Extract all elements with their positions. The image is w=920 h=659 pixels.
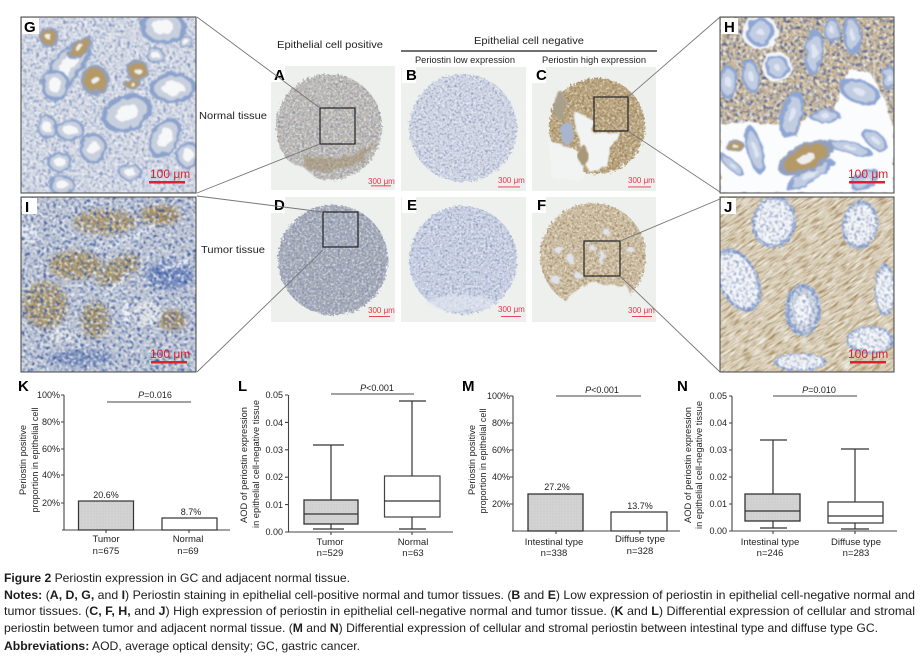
caption: tumor tissues. ( C, F, H, and J) High expression of periostin in epithelial cell-negative normal and tumor tissue. ( K and L) Differential expression of cellular and stromal [4,604,915,618]
chart L: AOD box plot, tumor vs normal: L [238,378,247,395]
panel B: tissue core, normal, low expression [401,67,526,191]
panel C: tissue core, normal, high expression: C [536,67,547,84]
chart M: periostin positive proportion, intestinal vs diffuse: 27.2% [544,482,570,492]
panel J: tumor tissue epithelial negative magnified: 100 μm [848,347,888,361]
chart N: AOD box plot, intestinal vs diffuse: 0.03 [709,445,727,455]
chart M: periostin positive proportion, intestinal vs diffuse: 20% [492,499,510,509]
chart K: periostin positive proportion, tumor vs normal: 80% [42,417,60,427]
panel E: tissue core, tumor, low expression: 300 μm [498,305,525,314]
chart N: AOD box plot, intestinal vs diffuse: 0.01 [709,499,727,509]
caption: periostin between tumor and adjacent normal tissue. ( M and N) Differential expression of cellular and stromal periostin between intestinal type and diffuse type GC. [4,621,878,635]
panel A: tissue core, normal, positive: A [274,67,285,84]
chart M: periostin positive proportion, intestinal vs diffuse: P<0.001 [585,385,619,395]
chart K: periostin positive proportion, tumor vs normal: Normal [173,534,203,545]
chart M: periostin positive proportion, intestinal vs diffuse: Intestinal type [525,537,583,548]
chart L: AOD box plot, tumor vs normal: 0.05 [265,390,283,400]
chart M: periostin positive proportion, intestinal vs diffuse: 40% [492,472,510,482]
chart L: AOD box plot, tumor vs normal: 0.03 [265,445,283,455]
chart L: AOD box plot, tumor vs normal: n=63 [402,548,424,559]
chart K: periostin positive proportion, tumor vs normal: n=675 [93,546,119,557]
panel B: tissue core, normal, low expression: B [406,67,417,84]
panel D: tissue core, tumor, positive [271,197,395,322]
chart K: periostin positive proportion, tumor vs normal [18,378,230,557]
chart K: periostin positive proportion, tumor vs normal: proportion in epithelial cell [30,407,40,512]
chart K: periostin positive proportion, tumor vs normal: 40% [42,470,60,480]
panel A: tissue core, normal, positive [271,66,395,190]
y axis title: AOD of periostin expression [239,407,249,523]
panel D: tissue core, tumor, positive: D [274,197,285,214]
row label: tumor tissue: Tumor tissue [201,244,265,256]
caption [4,571,915,653]
chart M: periostin positive proportion, intestinal vs diffuse: 80% [492,418,510,428]
chart K: periostin positive proportion, tumor vs normal: Tumor [92,534,120,545]
panel C: tissue core, normal, high expression [532,67,656,191]
chart L: AOD box plot, tumor vs normal [238,378,453,559]
panel E: tissue core, tumor, low expression [401,197,526,322]
chart M: periostin positive proportion, intestinal vs diffuse: 60% [492,445,510,455]
panel I: tumor tissue epithelial positive magnified [21,197,196,372]
panel C: tissue core, normal, high expression: 300 μm [628,176,655,185]
chart M: periostin positive proportion, intestinal vs diffuse: n=338 [541,548,567,559]
chart M: periostin positive proportion, intestinal vs diffuse [462,378,680,559]
panel J: tumor tissue epithelial negative magnified [559,39,920,536]
column header: epithelial cell positive: Epithelial cell positive [277,39,383,51]
row label: normal tissue: Normal tissue [199,110,267,122]
chart N: AOD box plot, intestinal vs diffuse [677,378,897,559]
chart N: AOD box plot, intestinal vs diffuse: in epithelial cell-negative tissue [694,401,704,529]
panel F: tissue core, tumor, high expression: F [537,197,546,214]
panel I: tumor tissue epithelial positive magnified: I [25,199,29,216]
chart K: periostin positive proportion, tumor vs normal: 100% [37,390,60,400]
chart N: AOD box plot, intestinal vs diffuse: Intestinal type [741,537,799,548]
chart L: AOD box plot, tumor vs normal: 0.00 [265,527,283,537]
caption: Figure 2 Periostin expression in GC and adjacent normal tissue. [4,571,350,585]
chart K: periostin positive proportion, tumor vs normal: n=69 [177,546,199,557]
caption: Abbreviations: AOD, average optical density; GC, gastric cancer. [4,639,360,653]
chart M: periostin positive proportion, intestinal vs diffuse: 13.7% [627,501,653,511]
y axis title: AOD of periostin expression [683,407,693,523]
chart N: AOD box plot, intestinal vs diffuse: 0.04 [709,418,727,428]
chart N: AOD box plot, intestinal vs diffuse: P=0.010 [802,385,836,395]
chart L: AOD box plot, tumor vs normal: n=529 [317,548,343,559]
panel J: tumor tissue epithelial negative magnified: J [724,199,732,216]
chart K: periostin positive proportion, tumor vs normal: 60% [42,444,60,454]
chart L: AOD box plot, tumor vs normal: 0.02 [265,472,283,482]
panel D: tissue core, tumor, positive: 300 μm [368,306,395,315]
chart N: AOD box plot, intestinal vs diffuse: N [677,378,688,395]
panel H: normal tissue epithelial negative magnified: H [724,19,735,36]
chart N: AOD box plot, intestinal vs diffuse: 0.05 [709,391,727,401]
chart M: periostin positive proportion, intestinal vs diffuse: M [462,378,474,395]
panel G: normal tissue epithelial positive magnified [21,10,200,195]
chart N: AOD box plot, intestinal vs diffuse: Diffuse type [831,537,881,548]
panel B: tissue core, normal, low expression: 300 μm [498,176,525,185]
chart L: AOD box plot, tumor vs normal: in epithelial cell-negative tissue [251,400,261,528]
panel E: tissue core, tumor, low expression: E [407,197,417,214]
panel G: normal tissue epithelial positive magnified: G [24,19,36,36]
panel F: tissue core, tumor, high expression [532,197,656,322]
chart L: AOD box plot, tumor vs normal: Tumor [316,537,344,548]
panel I: tumor tissue epithelial positive magnified: 100 μm [150,347,190,361]
chart L: AOD box plot, tumor vs normal: P<0.001 [360,383,394,393]
chart L: AOD box plot, tumor vs normal: 0.04 [265,418,283,428]
chart M: periostin positive proportion, intestinal vs diffuse: proportion in epithelial cell [478,408,488,514]
chart N: AOD box plot, intestinal vs diffuse: n=246 [757,548,783,559]
chart L: AOD box plot, tumor vs normal: 0.01 [265,500,283,510]
zoom connector lines [197,17,720,372]
chart K: periostin positive proportion, tumor vs normal: 20.6% [93,490,119,500]
panel F: tissue core, tumor, high expression: 300 μm [628,306,655,315]
column header: epithelial cell negative: Epithelial cell negative [474,35,584,47]
panel H: normal tissue epithelial negative magnified [717,14,896,195]
caption: Notes: (A, D, G, and I) Periostin staining in epithelial cell-positive normal and tumor tissues. ( B and E) Low expression of periostin in epithelial cell-negative normal and [4,588,915,602]
chart M: periostin positive proportion, intestinal vs diffuse: 100% [487,391,510,401]
chart N: AOD box plot, intestinal vs diffuse: 0.00 [709,526,727,536]
subheader: periostin low expression: Periostin low expression [415,55,515,65]
chart K: periostin positive proportion, tumor vs normal: 20% [42,498,60,508]
chart N: AOD box plot, intestinal vs diffuse: n=283 [843,548,869,559]
panel A: tissue core, normal, positive: 300 μm [368,177,395,186]
panel G: normal tissue epithelial positive magnified: 100 μm [150,167,190,181]
chart K: periostin positive proportion, tumor vs normal: 8.7% [181,507,201,517]
chart K: periostin positive proportion, tumor vs normal: P=0.016 [138,390,172,400]
chart N: AOD box plot, intestinal vs diffuse: 0.02 [709,472,727,482]
subheader: periostin high expression: Periostin high expression [542,55,646,65]
chart K: periostin positive proportion, tumor vs normal: K [18,378,29,395]
chart M: periostin positive proportion, intestinal vs diffuse: n=328 [627,546,653,557]
chart M: periostin positive proportion, intestinal vs diffuse: Diffuse type [615,534,665,545]
chart L: AOD box plot, tumor vs normal: Normal [398,537,428,548]
panel H: normal tissue epithelial negative magnified: 100 μm [848,167,888,181]
y axis title: Periostin positive [467,425,477,495]
y axis title: Periostin positive [18,425,28,495]
